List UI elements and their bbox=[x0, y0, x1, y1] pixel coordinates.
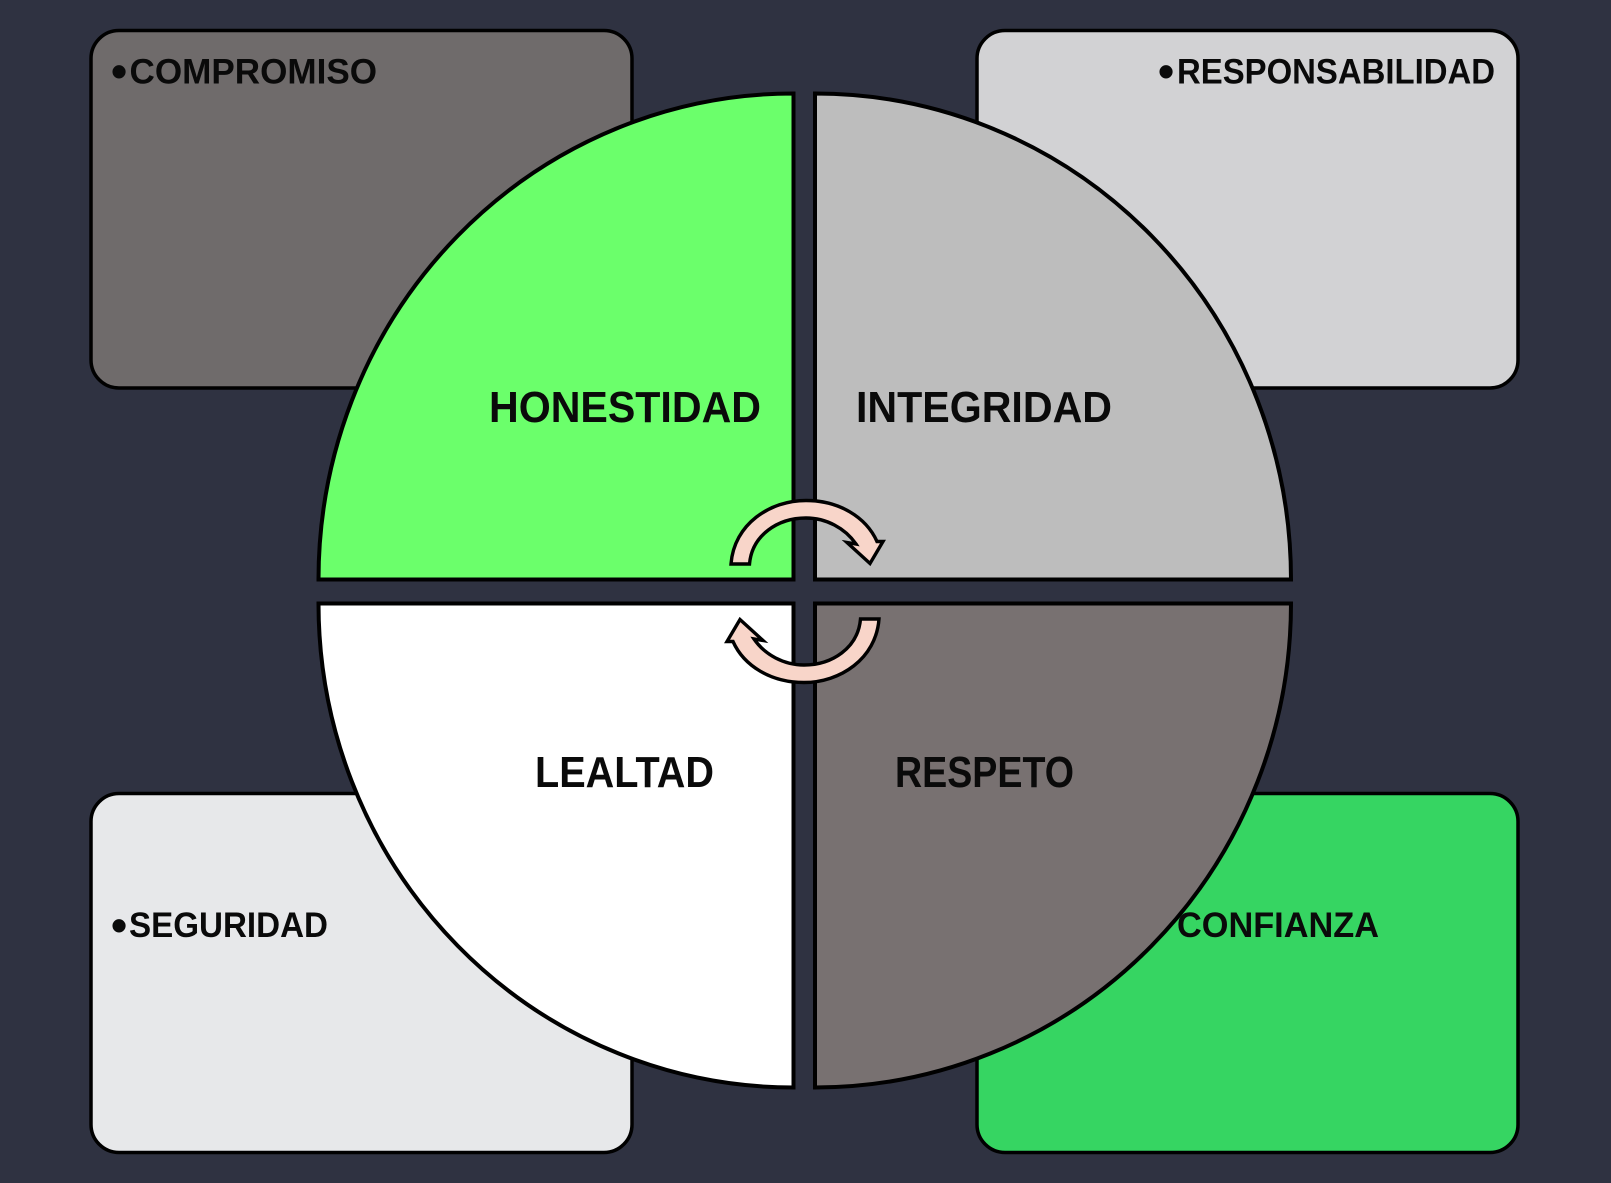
arrow: clockwise top bbox=[731, 500, 883, 564]
quadrant: integridad bbox=[815, 94, 1291, 580]
card text: • bbox=[1150, 899, 1166, 951]
card text: SEGURIDAD bbox=[129, 906, 328, 945]
quadrant shape bbox=[815, 604, 1291, 1088]
card text: • bbox=[111, 899, 127, 951]
quadrant: lealtad bbox=[318, 604, 794, 1088]
panel: compromiso bbox=[91, 30, 632, 388]
card text: RESPONSABILIDAD bbox=[1177, 52, 1495, 92]
quadrant shape bbox=[815, 94, 1291, 580]
panel: confianza bbox=[977, 794, 1518, 1152]
card background bbox=[977, 30, 1518, 388]
quadrant label: RESPETO bbox=[895, 748, 1074, 797]
card text: • bbox=[111, 45, 127, 97]
card text: • bbox=[1158, 45, 1174, 97]
quadrant label: HONESTIDAD bbox=[489, 383, 761, 432]
quadrant label: LEALTAD bbox=[535, 748, 714, 797]
quadrant shape bbox=[318, 604, 794, 1088]
card background bbox=[91, 30, 632, 388]
quadrant: respeto bbox=[815, 604, 1291, 1088]
panel: seguridad bbox=[91, 794, 632, 1152]
quadrant label: INTEGRIDAD bbox=[856, 383, 1112, 432]
card background bbox=[977, 794, 1518, 1152]
card text bbox=[111, 45, 377, 97]
quadrant shape bbox=[318, 94, 794, 580]
card background bbox=[91, 794, 632, 1152]
card text: CONFIANZA bbox=[1177, 906, 1379, 945]
panel: responsabilidad bbox=[977, 30, 1518, 388]
card text bbox=[1158, 45, 1495, 97]
card text bbox=[1150, 899, 1379, 951]
card text bbox=[111, 899, 328, 951]
arrow: clockwise bottom bbox=[727, 619, 879, 682]
card text: COMPROMISO bbox=[130, 52, 377, 92]
quadrant: honestidad bbox=[318, 94, 794, 580]
